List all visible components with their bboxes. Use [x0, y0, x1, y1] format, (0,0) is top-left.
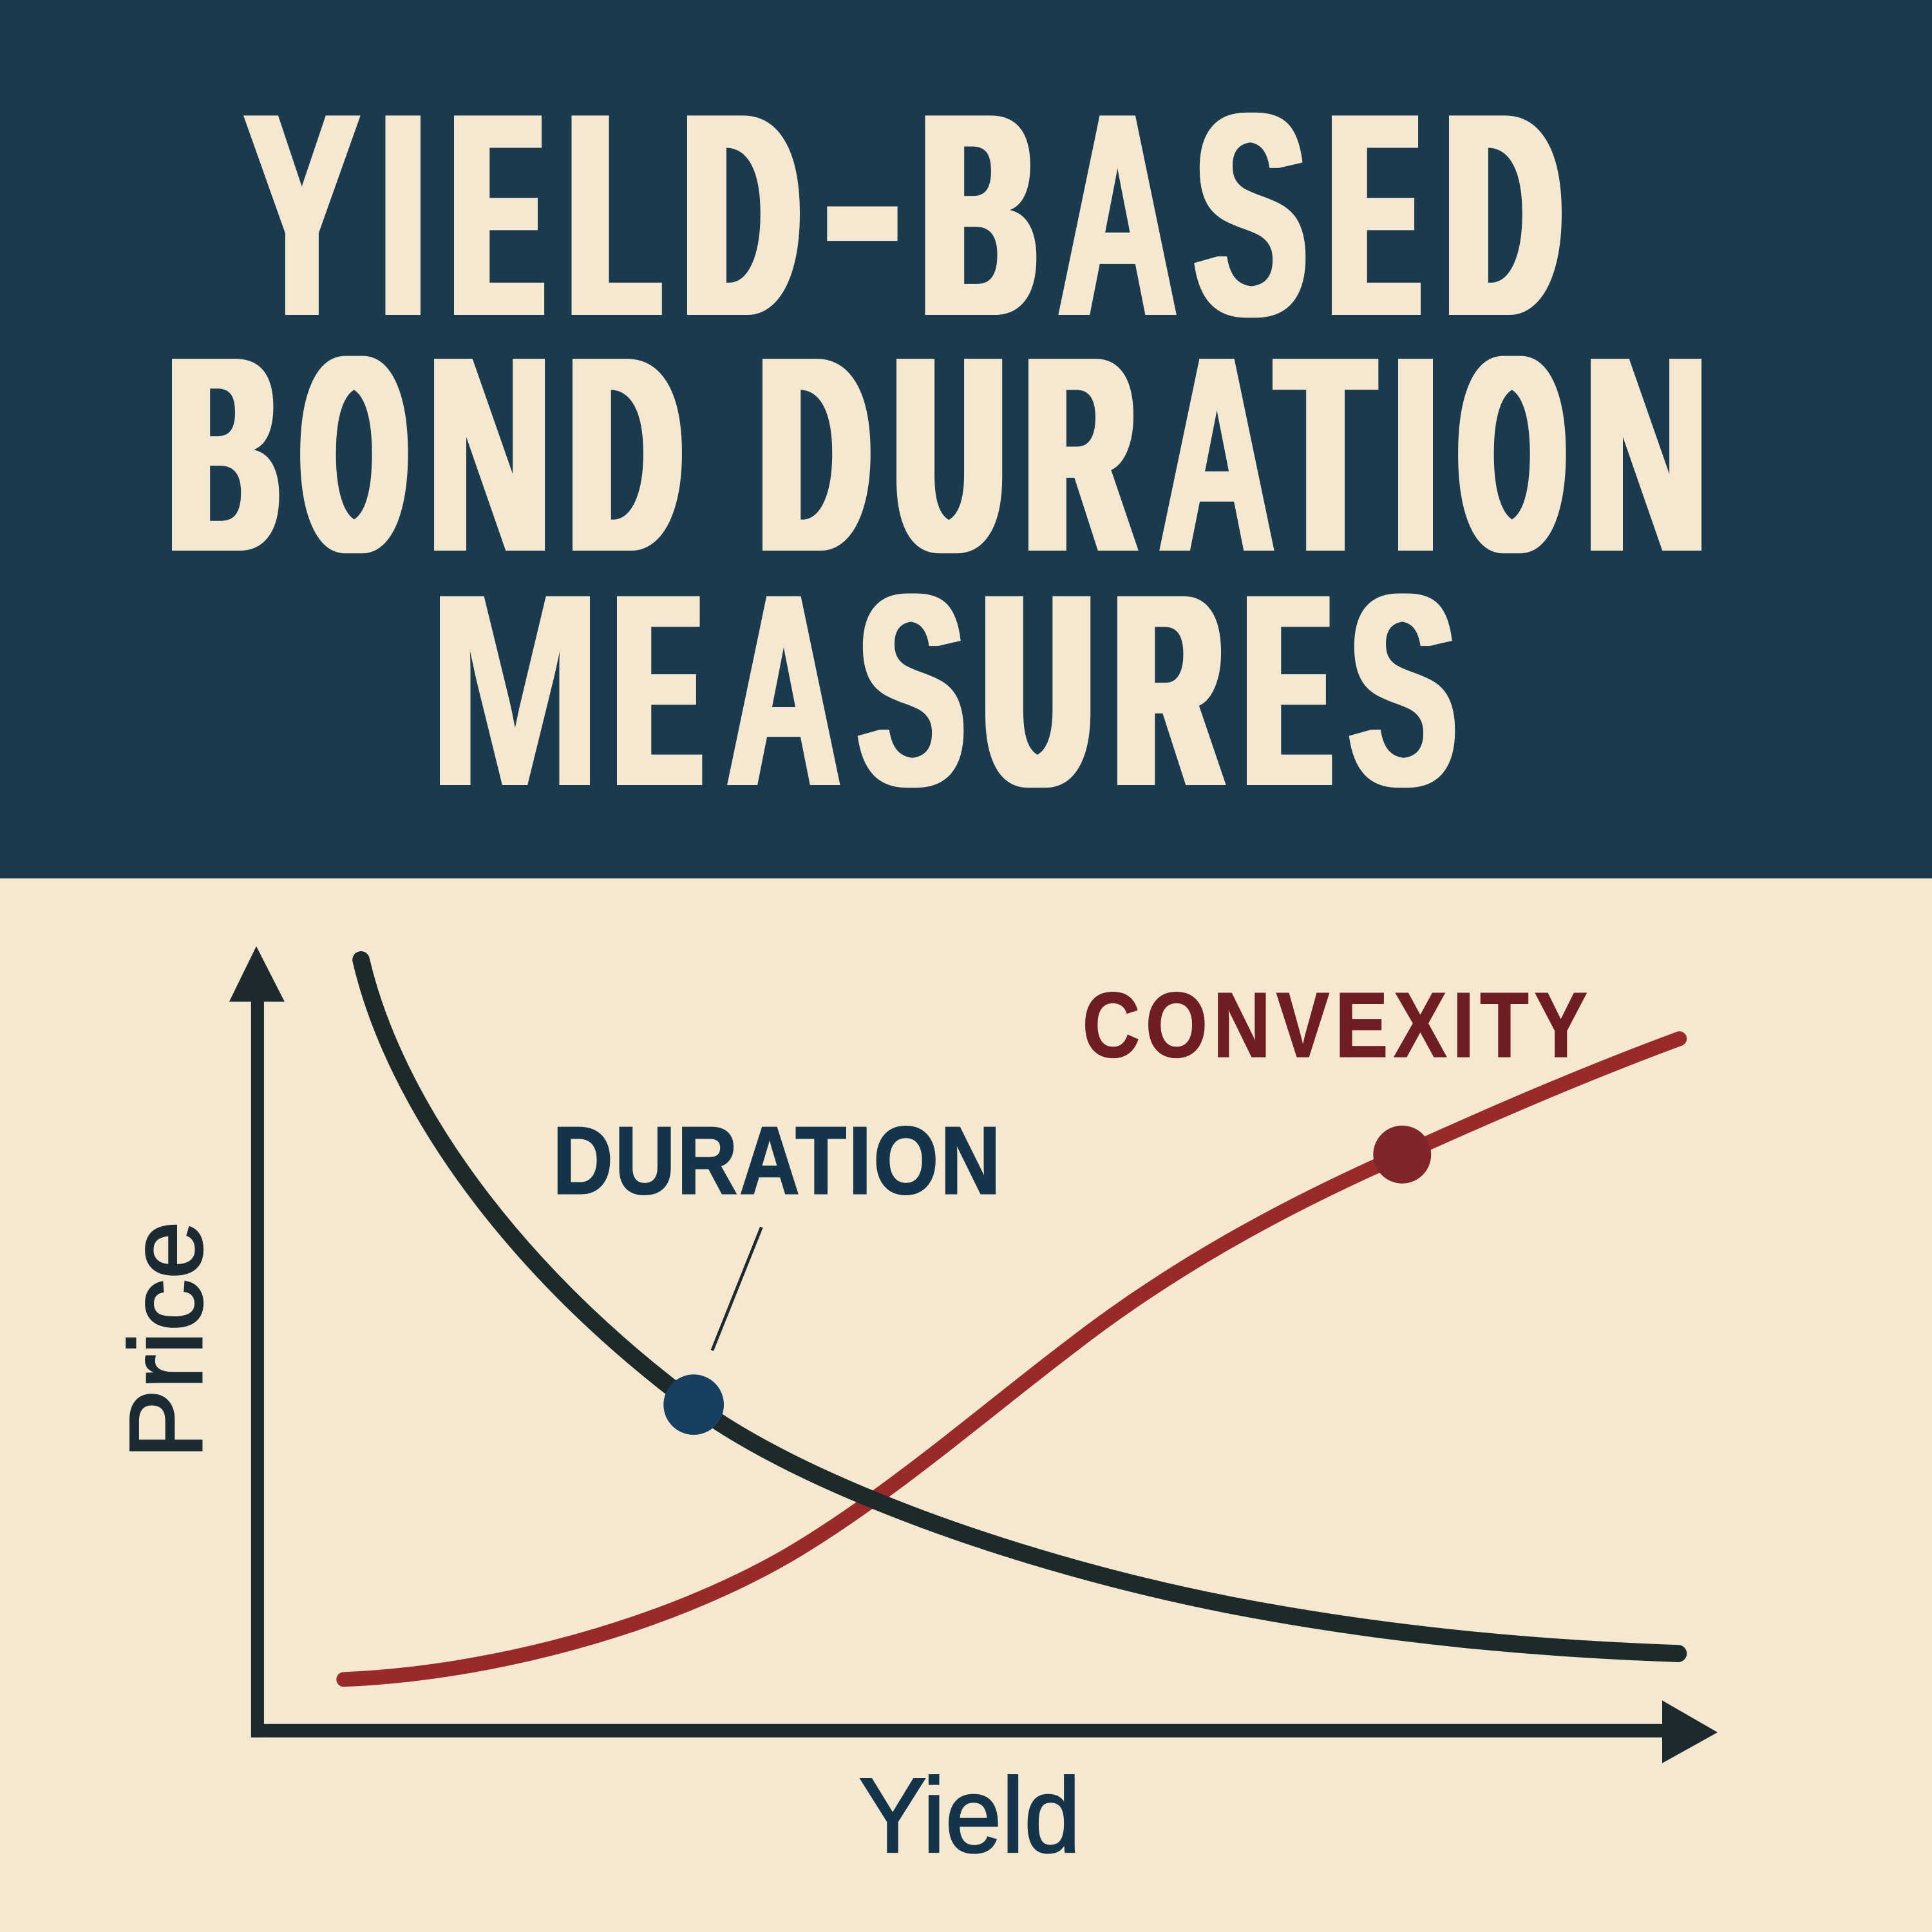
title line 2: O — [1461, 298, 1563, 610]
title line 3: S — [1349, 537, 1457, 844]
duration point — [663, 1374, 724, 1435]
line chart — [109, 946, 1718, 1875]
title line 2: R — [1027, 299, 1133, 611]
title line 1: Y — [245, 53, 359, 377]
title line 2: O — [303, 298, 405, 610]
title — [171, 37, 1708, 844]
title line 1: D — [685, 53, 798, 377]
title line 1: I — [385, 52, 421, 377]
x axis label: Yield — [859, 1756, 1081, 1875]
title line 1: - — [827, 37, 898, 361]
convexity curve — [344, 1039, 1680, 1680]
price-yield curve — [361, 960, 1678, 1654]
panel: chart background — [0, 878, 1932, 1932]
title line 1: D — [1447, 53, 1560, 377]
convexity point — [1373, 1126, 1431, 1184]
title line 3: M — [428, 537, 602, 844]
duration label: DURATION — [553, 1106, 1001, 1214]
title line 3 — [428, 537, 1457, 844]
title line 3: S — [858, 537, 965, 844]
title line 2: N — [428, 299, 551, 611]
title line 3: E — [617, 537, 699, 843]
title line 2: A — [1159, 299, 1274, 610]
title line 1: B — [923, 53, 1035, 377]
title line 3: U — [985, 538, 1091, 844]
y axis arrow — [229, 946, 285, 1738]
title line 2 — [171, 298, 1708, 611]
title line 2: T — [1279, 299, 1372, 610]
duration leader line — [712, 1227, 761, 1350]
panel: title background — [0, 0, 1932, 878]
title line 2: I — [1398, 299, 1433, 611]
convexity label: CONVEXITY — [1083, 974, 1587, 1077]
y axis label: Price — [109, 1221, 224, 1459]
title line 3: E — [1247, 537, 1329, 843]
title line 2: B — [171, 299, 278, 610]
title line 2: D — [571, 298, 680, 610]
title line 1: S — [1194, 53, 1308, 377]
title line 2: D — [761, 298, 868, 610]
title line 3: A — [727, 537, 840, 844]
title line 1: A — [1058, 53, 1177, 377]
title line 1 — [245, 37, 1560, 377]
title line 1: L — [571, 53, 658, 377]
title line 2: U — [896, 299, 1003, 610]
x axis arrow — [251, 1700, 1718, 1763]
title line 1: E — [1332, 53, 1417, 377]
title line 2: N — [1584, 299, 1708, 611]
title line 3: R — [1116, 538, 1220, 844]
title line 1: E — [453, 53, 541, 376]
